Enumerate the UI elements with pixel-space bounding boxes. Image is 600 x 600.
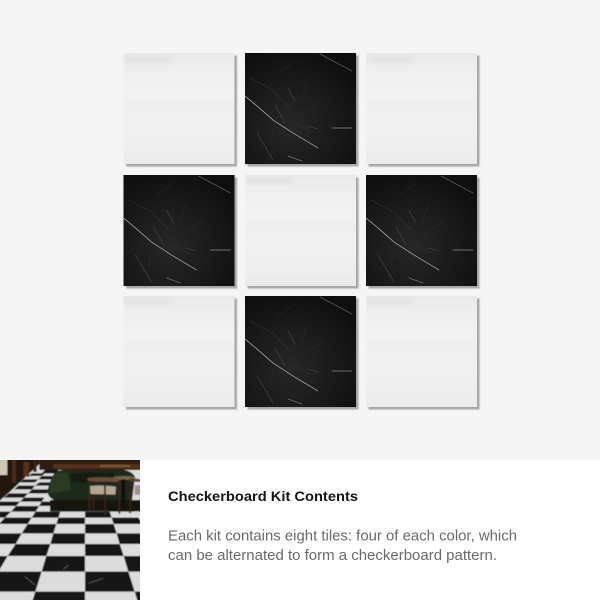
floor tile veins bbox=[25, 565, 103, 585]
table bbox=[113, 476, 135, 480]
left wall and window bbox=[0, 457, 39, 503]
tile: white, row 1 column 1 bbox=[124, 53, 237, 166]
tile: black, row 2 column 3 bbox=[366, 175, 480, 288]
tile: white, row 3 column 3 bbox=[366, 296, 480, 410]
tile: black, row 2 column 1 bbox=[124, 175, 237, 288]
tile grid bbox=[124, 53, 480, 410]
caption body text bbox=[168, 528, 517, 564]
chair 2 bbox=[129, 478, 142, 482]
sofa bbox=[48, 470, 135, 503]
checkerboard floor bbox=[0, 470, 187, 600]
caption heading: Checkerboard Kit Contents bbox=[168, 488, 358, 504]
caption body text: can be alternated to form a checkerboard pattern. bbox=[168, 548, 497, 564]
tile: black, row 1 column 2 bbox=[245, 53, 358, 166]
caption panel background bbox=[0, 460, 600, 600]
tile: white, row 1 column 3 bbox=[366, 53, 480, 166]
floor shadow beneath sofa bbox=[50, 500, 143, 511]
tile: white, row 2 column 2 bbox=[245, 175, 358, 288]
tile: white, row 3 column 1 bbox=[124, 296, 237, 410]
tile: black, row 3 column 2 bbox=[245, 296, 358, 410]
back wall bbox=[39, 457, 143, 470]
photo: lounge with checkerboard floor bbox=[0, 460, 140, 600]
chair 1 bbox=[87, 477, 119, 482]
caption body text: Each kit contains eight tiles: four of each color, which bbox=[168, 528, 517, 544]
